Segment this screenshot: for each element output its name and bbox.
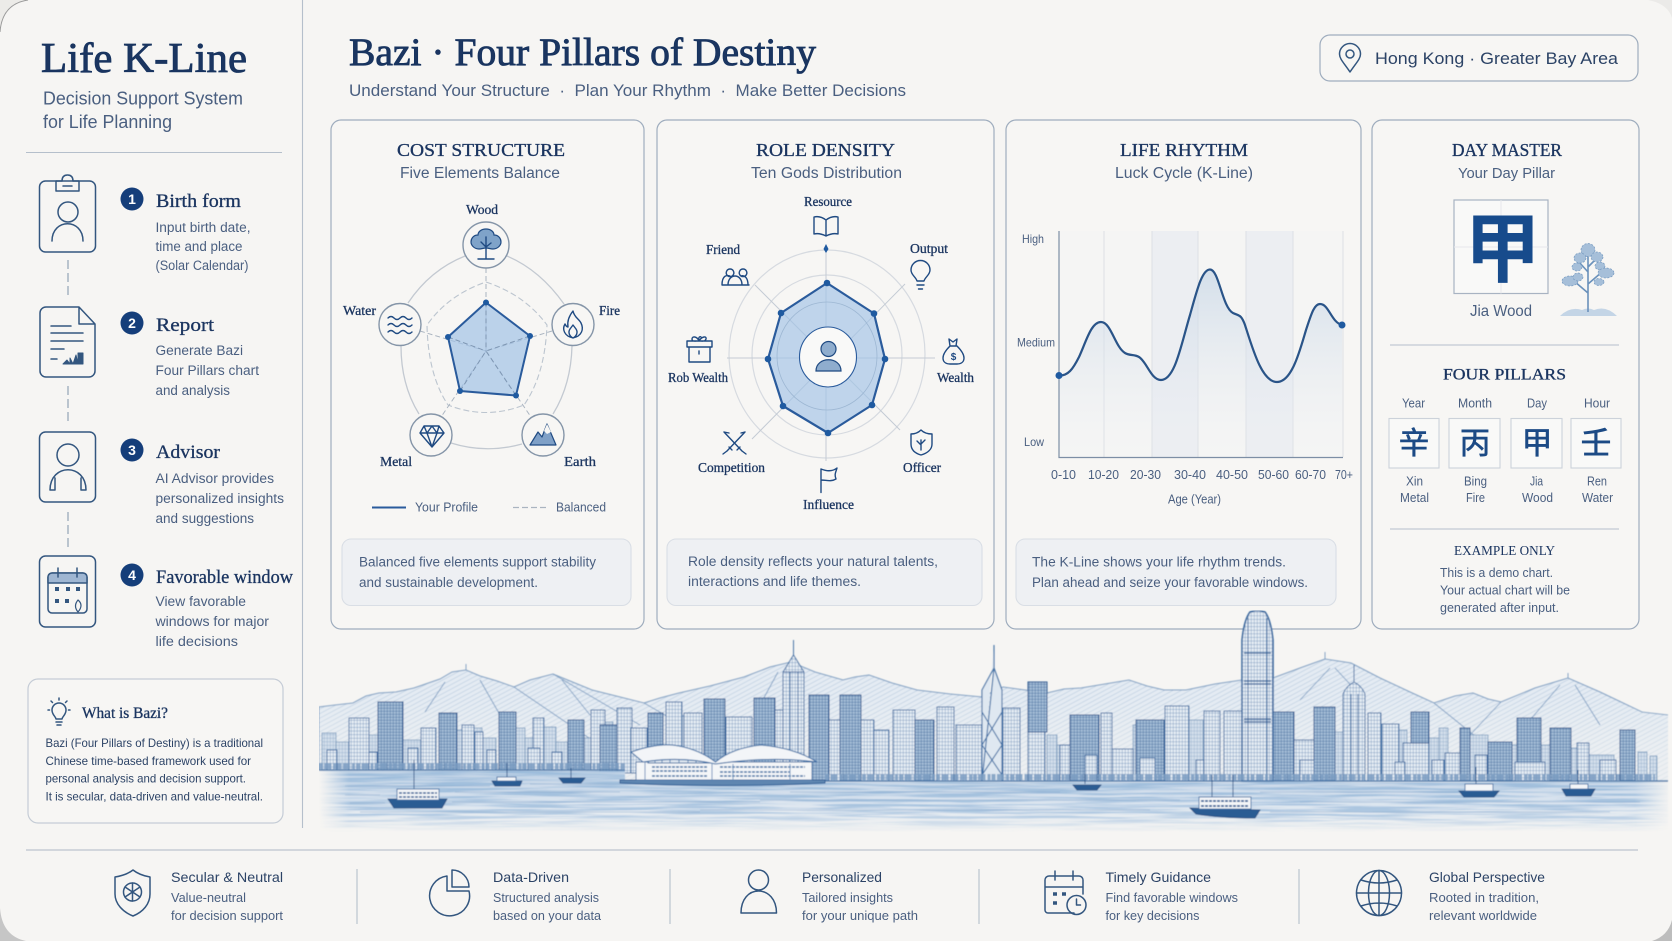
pillar names: Water (1582, 491, 1613, 505)
profile polygon (445, 300, 533, 398)
step 4: favorable window (40, 556, 293, 649)
text: for your unique path (802, 908, 918, 923)
step 3: advisor (40, 432, 284, 526)
Central Plaza tower (783, 640, 804, 781)
icon: water (379, 304, 421, 346)
step number (120, 438, 144, 462)
radar labels: Earth (564, 455, 596, 470)
x axis labels: 40-50 (1216, 468, 1248, 482)
heading: LIFE RHYTHM (1120, 140, 1248, 160)
icon: friends (722, 269, 749, 285)
y axis labels (1017, 232, 1055, 449)
radar chart: five elements (401, 256, 572, 449)
feature: secular and neutral (115, 869, 283, 923)
icon: clipboard person (40, 175, 96, 252)
panel: life rhythm (1006, 120, 1361, 629)
step number: 2 (128, 315, 136, 331)
text: Personalized (802, 869, 882, 885)
icon: tree illustration (1560, 244, 1617, 316)
convention centre (620, 745, 825, 786)
panel: what is Bazi (28, 679, 283, 823)
feature: personalized (741, 869, 918, 923)
subheading: Ten Gods Distribution (751, 165, 902, 182)
header subtitle: Understand Your Structure · Plan Your Rhythm · Make Better Decisions (349, 81, 906, 100)
note (1016, 539, 1336, 606)
description: Four Pillars chart (156, 363, 259, 378)
description: and suggestions (156, 511, 254, 526)
text: Structured analysis (493, 890, 599, 905)
radar labels: Officer (903, 460, 941, 475)
subtitle: Decision Support System (43, 88, 243, 108)
title: Life K-Line (41, 36, 247, 82)
radar chart: ten gods (727, 244, 935, 461)
note: and sustainable development. (359, 575, 538, 590)
feature: global perspective (1356, 869, 1545, 923)
text: Value-neutral (171, 890, 246, 905)
explanation: Chinese time-based framework used for (46, 754, 251, 768)
note: The K-Line shows your life rhythm trends. (1032, 554, 1286, 570)
boats (388, 760, 1595, 818)
location badge (1320, 35, 1638, 81)
explanation: Bazi (Four Pillars of Destiny) is a traditional (46, 736, 263, 750)
text: Find favorable windows (1106, 890, 1238, 905)
note (342, 539, 631, 606)
legend (372, 500, 606, 514)
description: personalized insights (156, 491, 284, 506)
text: Global Perspective (1429, 869, 1545, 885)
feature: data-driven (430, 869, 602, 923)
day pillar name: Jia Wood (1470, 303, 1532, 320)
text: for decision support (171, 908, 283, 923)
location text: Hong Kong · Greater Bay Area (1375, 49, 1619, 68)
x axis labels: 60-70 (1295, 468, 1326, 482)
illustration: Hong Kong skyline (319, 610, 1672, 832)
front buildings (349, 702, 1589, 781)
y axis labels: High (1022, 232, 1044, 246)
pillar column labels: Hour (1584, 396, 1610, 410)
back buildings (322, 716, 1657, 781)
x axis labels: 70+ (1335, 468, 1353, 482)
pillar names: Fire (1466, 491, 1485, 505)
text: relevant worldwide (1429, 908, 1537, 923)
dark buildings (378, 682, 1635, 781)
note: Plan ahead and seize your favorable windows. (1032, 575, 1308, 590)
day pillar character: 甲 (1464, 188, 1540, 298)
explanation: personal analysis and decision support. (46, 772, 246, 786)
subheading: Luck Cycle (K-Line) (1115, 165, 1253, 182)
x axis labels: Age (Year) (1168, 492, 1221, 506)
text: Tailored insights (802, 890, 893, 905)
heading: Birth form (156, 191, 241, 212)
center person (800, 327, 856, 387)
text: Rooted in tradition, (1429, 890, 1539, 905)
shore (319, 766, 1668, 781)
icon: flag (821, 468, 837, 492)
pillar: hour: 壬 (1580, 418, 1612, 463)
text: Data-Driven (493, 869, 569, 885)
icon: lightbulb (48, 698, 70, 725)
heading: Report (156, 315, 215, 336)
radar labels: Influence (803, 497, 854, 512)
icon: money bag (943, 339, 964, 364)
pillar: month: 丙 (1460, 418, 1490, 463)
heading: COST STRUCTURE (397, 140, 565, 160)
text (1429, 869, 1545, 923)
panel: day master (1372, 120, 1639, 629)
icon: calendar clock (1045, 871, 1086, 914)
step number (120, 312, 144, 334)
radar labels: Wealth (937, 370, 974, 385)
panel: role density (657, 120, 994, 629)
icon: report document (40, 307, 95, 377)
panel: cost structure (331, 120, 644, 629)
pillar names: Jia (1530, 474, 1543, 488)
note: interactions and life themes. (688, 574, 861, 589)
subheading: Five Elements Balance (400, 165, 560, 182)
note: Role density reflects your natural talents, (688, 554, 938, 569)
x axis labels: 20-30 (1130, 468, 1161, 482)
icon: shield (911, 430, 932, 455)
k-line curve (1059, 270, 1342, 382)
Bank of China tower (982, 645, 1002, 781)
text (802, 869, 918, 923)
header title: Bazi · Four Pillars of Destiny (349, 31, 816, 74)
icon: map pin (1340, 44, 1360, 72)
description: Input birth date, (156, 220, 250, 235)
legend: Balanced (556, 500, 606, 514)
text: for key decisions (1106, 908, 1200, 923)
subheading: Your Day Pillar (1458, 165, 1555, 182)
note: Balanced five elements support stability (359, 554, 596, 570)
pillar column labels: Year (1402, 396, 1425, 410)
icon: calendar (40, 556, 96, 627)
icon: pie chart (430, 870, 470, 916)
pillar names: Wood (1522, 491, 1553, 505)
x axis labels: 50-60 (1258, 468, 1289, 482)
step 1: birth form (40, 175, 250, 273)
icon: earth (522, 414, 564, 456)
text (171, 869, 283, 923)
explanation: It is secular, data-driven and value-neutral. (46, 790, 263, 804)
radar labels: Friend (706, 242, 740, 257)
icon: money bag: $ (951, 352, 957, 363)
heading: Advisor (156, 442, 221, 463)
pillar: year: 辛 (1398, 418, 1430, 463)
radar labels (668, 194, 974, 512)
example note: generated after input. (1440, 601, 1559, 615)
low waterfront buildings (327, 748, 1616, 781)
radar labels: Water (343, 304, 376, 319)
pillar names: Bing (1464, 474, 1487, 488)
legend: Your Profile (415, 500, 478, 514)
step number: 1 (128, 191, 136, 207)
pillar names: Ren (1587, 474, 1607, 488)
tower with spire (1343, 665, 1365, 781)
icon: person (741, 870, 776, 913)
radar labels: Wood (466, 203, 498, 218)
pillar: month (1449, 418, 1500, 468)
icon: book (814, 217, 838, 236)
step 2: report (40, 307, 259, 398)
description: Generate Bazi (156, 343, 243, 358)
pillar: hour (1571, 418, 1621, 468)
icon: globe (1356, 870, 1402, 916)
profile polygon (765, 280, 888, 436)
subtitle: for Life Planning (43, 112, 172, 132)
description: life decisions (156, 634, 238, 649)
y axis labels: Low (1024, 435, 1044, 449)
description: and analysis (156, 383, 230, 398)
text: Secular & Neutral (171, 869, 283, 885)
step number (120, 564, 144, 586)
x axis labels: 0-10 (1051, 468, 1076, 482)
radar labels: Metal (380, 455, 412, 470)
pillar names (1400, 474, 1613, 505)
pillar: day (1511, 418, 1562, 468)
feature: timely guidance (1045, 869, 1238, 923)
heading: ROLE DENSITY (756, 140, 895, 160)
radar labels: Rob Wealth (668, 370, 728, 385)
text: based on your data (493, 908, 602, 923)
text (1106, 869, 1238, 923)
text (493, 869, 602, 923)
step number (120, 188, 144, 210)
description: time and place (156, 239, 242, 254)
radar labels: Fire (599, 304, 620, 319)
radar labels: Competition (698, 460, 765, 475)
pillar column labels: Day (1527, 396, 1548, 410)
description: windows for major (154, 614, 270, 629)
pillar: year (1389, 418, 1439, 468)
heading: What is Bazi? (82, 705, 168, 722)
description: View favorable (156, 594, 246, 609)
description: (Solar Calendar) (156, 258, 248, 273)
pillar names: Xin (1406, 474, 1423, 488)
pillar names: Metal (1400, 491, 1429, 505)
example note: This is a demo chart. (1440, 566, 1553, 580)
step number: 3 (128, 442, 136, 458)
icon: advisor person (40, 432, 96, 502)
x axis labels: 30-40 (1174, 468, 1206, 482)
sidebar title block (41, 36, 247, 132)
icon: fire (552, 304, 594, 346)
icon: gift (687, 337, 712, 362)
pillar: day: 甲 (1522, 418, 1552, 463)
description: AI Advisor provides (156, 471, 274, 486)
mountains (319, 652, 1668, 781)
example note: Your actual chart will be (1440, 584, 1570, 598)
icon: metal (410, 414, 452, 456)
x axis labels (1051, 468, 1353, 506)
icon: shield (115, 870, 150, 916)
heading: DAY MASTER (1452, 140, 1562, 160)
pillar column labels: Month (1458, 396, 1492, 410)
heading: Favorable window (156, 567, 293, 588)
IFC tower (1242, 610, 1273, 781)
pillar column labels (1402, 396, 1610, 410)
example only heading: EXAMPLE ONLY (1454, 543, 1555, 558)
text: Timely Guidance (1106, 869, 1211, 885)
icon: crossed swords (723, 432, 746, 454)
y axis labels: Medium (1017, 336, 1055, 350)
radar labels: Resource (804, 194, 852, 209)
icon: lightbulb (911, 260, 930, 289)
note (667, 539, 982, 606)
x axis labels: 10-20 (1088, 468, 1119, 482)
step number: 4 (128, 567, 136, 583)
radar labels: Output (910, 241, 948, 256)
harbour water (319, 771, 1672, 832)
four pillars heading: FOUR PILLARS (1443, 366, 1566, 384)
radar labels (343, 203, 620, 470)
icon: wood (463, 222, 509, 268)
line chart: luck cycle (1056, 231, 1346, 458)
